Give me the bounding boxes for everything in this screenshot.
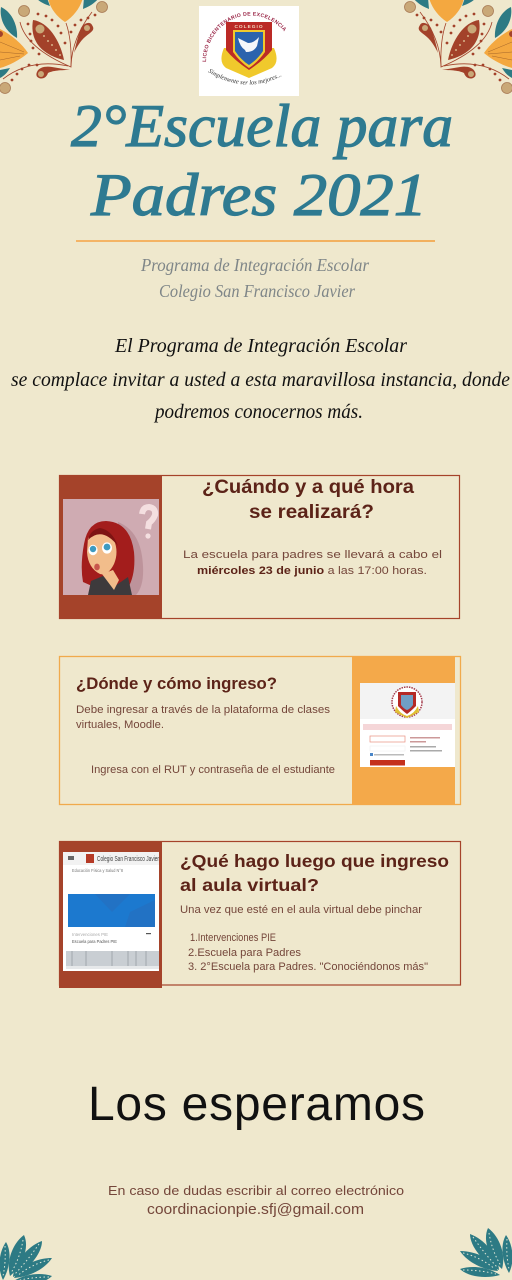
text: steps: 3. 2°Escuela para Padres. "Conociéndonos más" (188, 961, 428, 973)
title (71, 93, 453, 228)
logo: school crest (199, 6, 299, 96)
heading: ¿Qué hago luego que ingreso (180, 851, 449, 871)
heading: ¿Cuándo y a qué hora (202, 477, 414, 498)
text: platform: Ingresa con el RUT y contraseña de el estudiante (91, 764, 335, 776)
text: date and time: miércoles 23 de junio a las 17:00 horas. (197, 565, 427, 577)
invitation text (11, 335, 510, 423)
heading (202, 477, 414, 523)
title: Padres 2021 (90, 162, 427, 228)
text: steps: 2.Escuela para Padres (188, 947, 301, 959)
decoration: top left ornament (0, 0, 108, 94)
text: platform (76, 704, 335, 776)
panel: where (60, 656, 460, 805)
subtitle: Programa de Integración Escolar (140, 255, 370, 275)
invitation text: se complace invitar a usted a esta maravillosa instancia, donde (11, 369, 510, 391)
title: 2°Escuela para (71, 93, 453, 159)
subtitle (140, 255, 370, 301)
logo: school crest: Simplemente ser los mejores... (208, 69, 282, 84)
screenshot: login page (360, 683, 455, 767)
heading: se realizará? (249, 502, 374, 523)
text: steps: 1.Intervenciones PIE (190, 932, 276, 944)
closing message: Los esperamos (88, 1078, 425, 1131)
screenshot: virtual classroom (63, 852, 159, 971)
text: steps (180, 904, 428, 973)
contact text: coordinacionpie.sfj@gmail.com (147, 1201, 364, 1218)
screenshot: virtual classroom: Educación Física y Salud N°8 (72, 868, 123, 873)
contact text: En caso de dudas escribir al correo electrónico (108, 1183, 404, 1198)
text: platform: Debe ingresar a través de la plataforma de clases (76, 704, 331, 716)
screenshot: virtual classroom: Intervenciones PIE (72, 932, 108, 937)
illustration: thinking woman (63, 499, 159, 595)
decoration: bottom left leaves (0, 1235, 52, 1280)
decoration: bottom right leaves (460, 1228, 512, 1277)
heading: al aula virtual? (180, 875, 319, 895)
subtitle: Colegio San Francisco Javier (159, 281, 356, 301)
heading: ¿Dónde y cómo ingreso? (76, 674, 277, 693)
invitation text: El Programa de Integración Escolar (114, 335, 407, 357)
invitation text: podremos conocernos más. (153, 401, 363, 423)
screenshot: virtual classroom: Escuela para Padres PIE (72, 939, 117, 944)
text: platform: virtuales, Moodle. (76, 719, 164, 731)
panel: when (59, 475, 460, 619)
decoration: top right ornament (404, 0, 512, 94)
panel: after login (59, 841, 460, 988)
heading (180, 851, 449, 895)
logo: school crest: LICEO BICENTENARIO DE EXCELENCIA (202, 12, 286, 62)
logo: school crest: COLEGIO (234, 24, 264, 30)
text: date and time: La escuela para padres se llevará a cabo el (183, 549, 442, 561)
screenshot: virtual classroom: Colegio San Francisco Javier (97, 856, 159, 863)
contact text (108, 1183, 404, 1218)
divider line (76, 240, 435, 242)
text: date and time (183, 549, 442, 577)
text: steps: Una vez que esté en el aula virtual debe pinchar (180, 904, 422, 916)
